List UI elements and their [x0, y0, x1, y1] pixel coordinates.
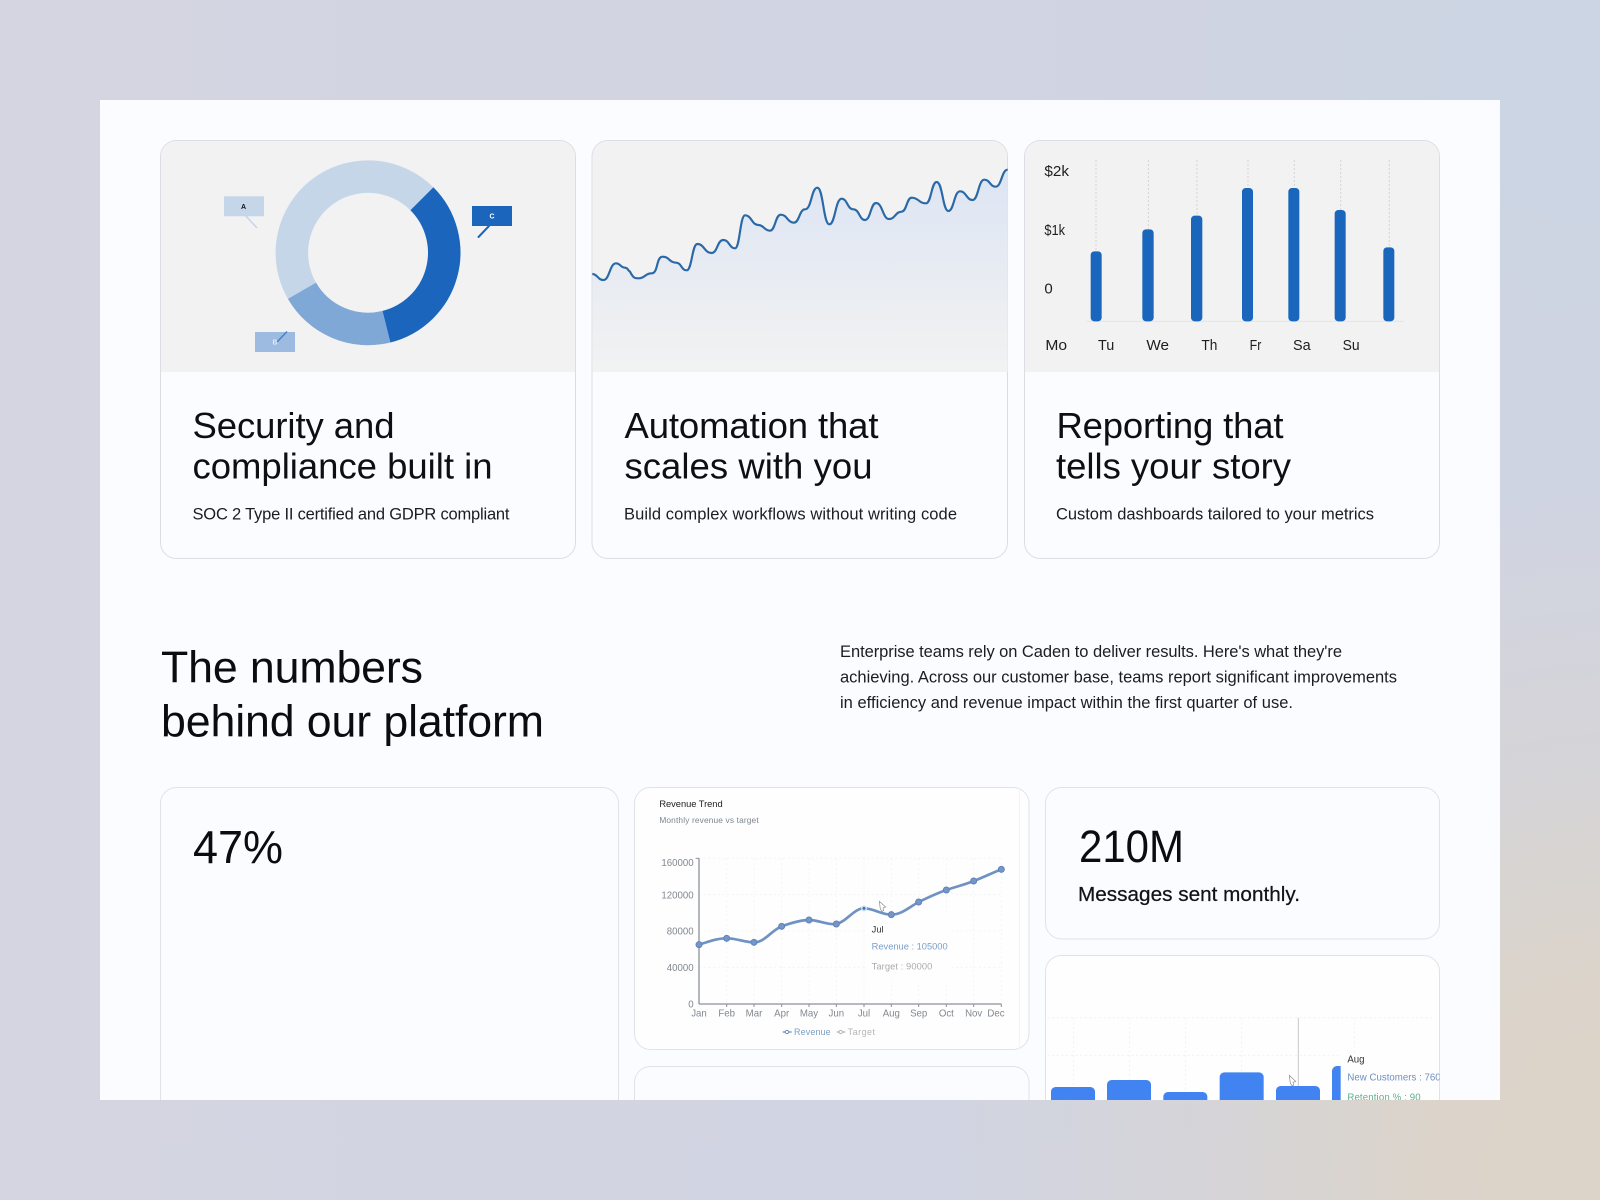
bar chart: Sa	[1293, 338, 1311, 354]
stat card: 210M: Messages sent monthly.	[1078, 883, 1300, 906]
heading: tells your story	[1056, 446, 1292, 486]
callout: C: C	[489, 214, 495, 220]
legend: Revenue	[794, 1027, 831, 1037]
area line chart	[592, 170, 1008, 372]
x axis labels: Sep	[910, 1009, 927, 1020]
grid	[1048, 1018, 1432, 1090]
section intro paragraph: achieving. Across our customer base, teams report significant improvements	[840, 668, 1397, 686]
tooltip backdrop	[865, 915, 951, 981]
y axis labels	[661, 858, 694, 1011]
bar chart: Su	[1343, 338, 1360, 354]
callout: A: A	[241, 204, 246, 211]
stat card: 210M: 210M	[1079, 821, 1184, 872]
section intro paragraph: Enterprise teams rely on Caden to deliver results. Here's what they're	[840, 643, 1342, 661]
description: SOC 2 Type II certified and GDPR compliant	[192, 506, 510, 524]
tooltip: Retention % : 90	[1347, 1092, 1421, 1103]
axes	[696, 858, 1001, 1007]
bar chart: We	[1146, 338, 1169, 354]
x axis labels: Nov	[965, 1009, 982, 1020]
x axis labels: Feb	[718, 1009, 735, 1020]
chart title: Revenue Trend	[659, 799, 723, 809]
x axis labels: Jan	[691, 1009, 707, 1020]
callout: B: B	[272, 340, 278, 346]
cursor	[879, 901, 886, 911]
tooltip: Jul	[872, 925, 884, 935]
panel: revenue trend chart	[634, 788, 1029, 1050]
x axis labels: Dec	[987, 1009, 1005, 1020]
y axis labels: 80000	[667, 927, 694, 938]
bar chart: Tu	[1098, 338, 1114, 354]
section title: behind our platform	[161, 698, 544, 747]
x axis labels: Jul	[858, 1009, 870, 1020]
chart subtitle: Monthly revenue vs target	[659, 815, 759, 825]
y axis labels: 120000	[661, 890, 694, 901]
heading: Reporting that	[1056, 405, 1284, 446]
stat card: 47%: 47%	[193, 821, 283, 873]
section title: The numbers	[161, 644, 423, 693]
heading: compliance built in	[192, 446, 492, 486]
x axis labels: Aug	[883, 1009, 900, 1020]
x axis labels	[692, 1009, 1004, 1018]
callout: B	[255, 332, 295, 352]
panel: reporting card	[1024, 140, 1440, 558]
crosshair	[1298, 1018, 1299, 1086]
legend	[782, 1028, 875, 1037]
y axis labels: 0	[688, 1000, 694, 1011]
bar chart: $2k	[1044, 164, 1070, 180]
x axis labels: May	[800, 1009, 818, 1020]
y axis labels: 160000	[661, 858, 694, 869]
tooltip: Aug	[1347, 1055, 1365, 1066]
x axis labels: Jun	[829, 1009, 844, 1020]
panel: security card	[160, 140, 576, 558]
y axis labels: 40000	[667, 963, 694, 974]
bar chart: Th	[1201, 338, 1217, 354]
heading: Security and	[192, 405, 394, 446]
cursor	[1289, 1075, 1296, 1086]
stat card: 47%	[160, 787, 619, 1100]
tooltip	[872, 925, 948, 972]
panel: automation card	[592, 140, 1008, 558]
heading: Automation that	[624, 405, 878, 446]
tooltip: Target : 90000	[872, 962, 932, 972]
heading: scales with you	[624, 446, 872, 486]
tooltip	[1347, 1055, 1441, 1103]
callout: A	[224, 196, 264, 228]
stat card: 210M	[1046, 788, 1440, 939]
tooltip: Revenue : 105000	[872, 942, 948, 952]
section title	[161, 644, 544, 747]
bar chart: $1k	[1044, 223, 1066, 239]
empty card below revenue chart	[634, 1066, 1030, 1100]
donut chart	[292, 177, 444, 329]
bar chart	[1044, 160, 1404, 354]
section intro paragraph	[840, 643, 1397, 712]
x axis labels: Apr	[774, 1009, 790, 1020]
heading	[1056, 405, 1292, 486]
callout: C	[472, 206, 512, 237]
bar chart: Mo	[1045, 338, 1067, 354]
x axis labels: Oct	[939, 1009, 954, 1020]
x axis labels: Mar	[746, 1009, 763, 1020]
heading	[624, 405, 878, 486]
description: Build complex workflows without writing code	[624, 506, 957, 524]
tooltip: New Customers : 760	[1347, 1072, 1441, 1083]
grid	[699, 858, 1001, 1004]
bar chart: Fr	[1250, 338, 1262, 354]
heading	[194, 412, 490, 486]
panel: customers bar chart	[1045, 955, 1440, 1100]
bar chart: 0	[1044, 281, 1053, 297]
description: Custom dashboards tailored to your metrics	[1056, 506, 1374, 524]
section intro paragraph: in efficiency and revenue impact within the first quarter of use.	[840, 694, 1293, 712]
revenue line	[696, 866, 1004, 948]
bars	[1050, 1066, 1341, 1100]
legend: Target	[848, 1027, 875, 1037]
